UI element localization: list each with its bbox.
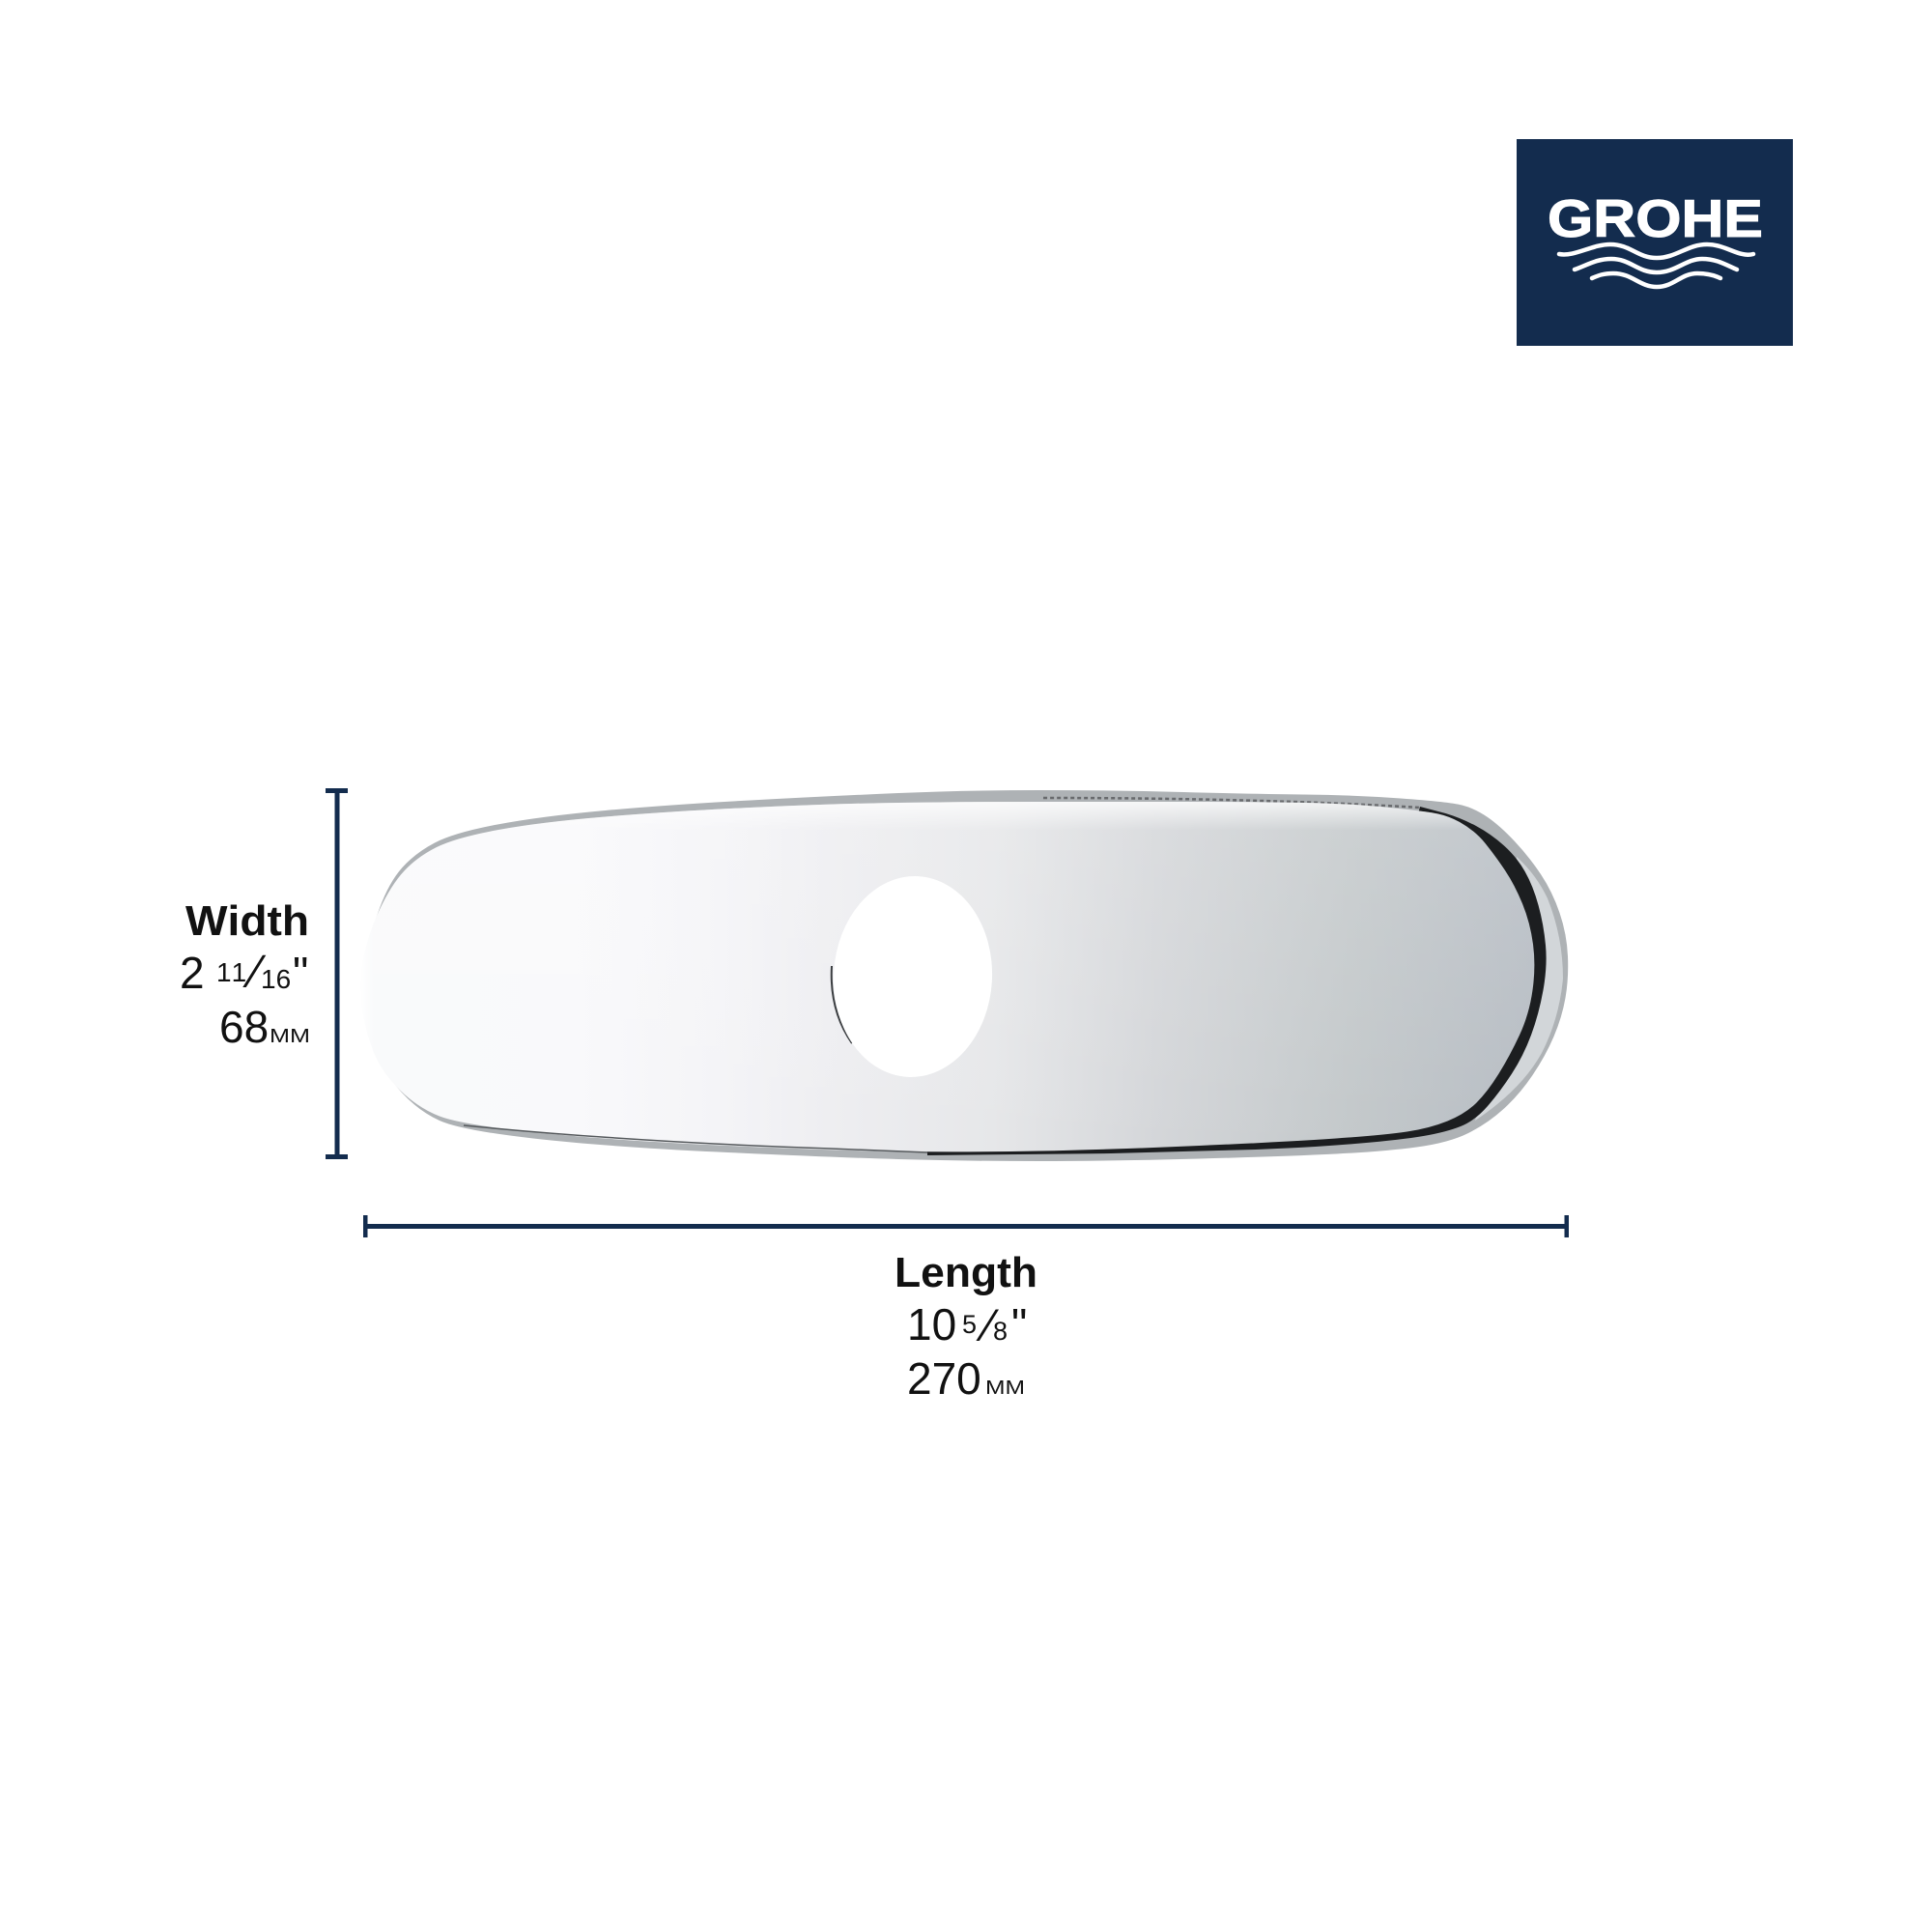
width in inches: ⁄	[242, 947, 267, 998]
width in inches: 16	[261, 964, 291, 994]
length in millimetres	[907, 1353, 1025, 1404]
length in inches	[907, 1299, 1027, 1350]
product: chrome deck plate	[360, 790, 1568, 1161]
width in millimetres: MM	[270, 1026, 310, 1047]
length heading: Length	[895, 1249, 1037, 1296]
length dimension bracket	[363, 1215, 1569, 1237]
length in inches: 5	[962, 1310, 977, 1339]
plate face	[360, 802, 1534, 1151]
width in inches	[180, 947, 308, 998]
length in inches: "	[1011, 1299, 1027, 1350]
width label	[180, 897, 310, 1052]
plate rim	[362, 790, 1568, 1161]
width in inches: "	[293, 948, 308, 998]
plate bottom dark line left	[464, 1125, 927, 1152]
length in millimetres: MM	[985, 1378, 1025, 1399]
width in millimetres: 68	[219, 1002, 269, 1052]
length in millimetres: 270	[907, 1353, 981, 1404]
plate right lighter lip	[1475, 857, 1563, 1121]
length in inches: 8	[993, 1317, 1008, 1346]
logo wordmark: GROHE	[1548, 188, 1763, 248]
width dimension bracket	[326, 788, 348, 1159]
logo waves	[1559, 244, 1753, 287]
plate top sheen	[360, 802, 1534, 1151]
length in inches: 10	[907, 1299, 956, 1350]
mounting hole	[829, 872, 997, 1081]
width in inches: 2	[180, 948, 205, 998]
length label	[895, 1249, 1037, 1404]
width in inches: 11	[216, 957, 246, 987]
width heading: Width	[185, 897, 309, 945]
length in inches: ⁄	[976, 1299, 999, 1350]
plate top edge speckle	[1043, 798, 1420, 808]
width in millimetres	[219, 1002, 310, 1052]
logo: GROHE	[1517, 139, 1793, 346]
plate black edge reflection	[927, 807, 1547, 1155]
